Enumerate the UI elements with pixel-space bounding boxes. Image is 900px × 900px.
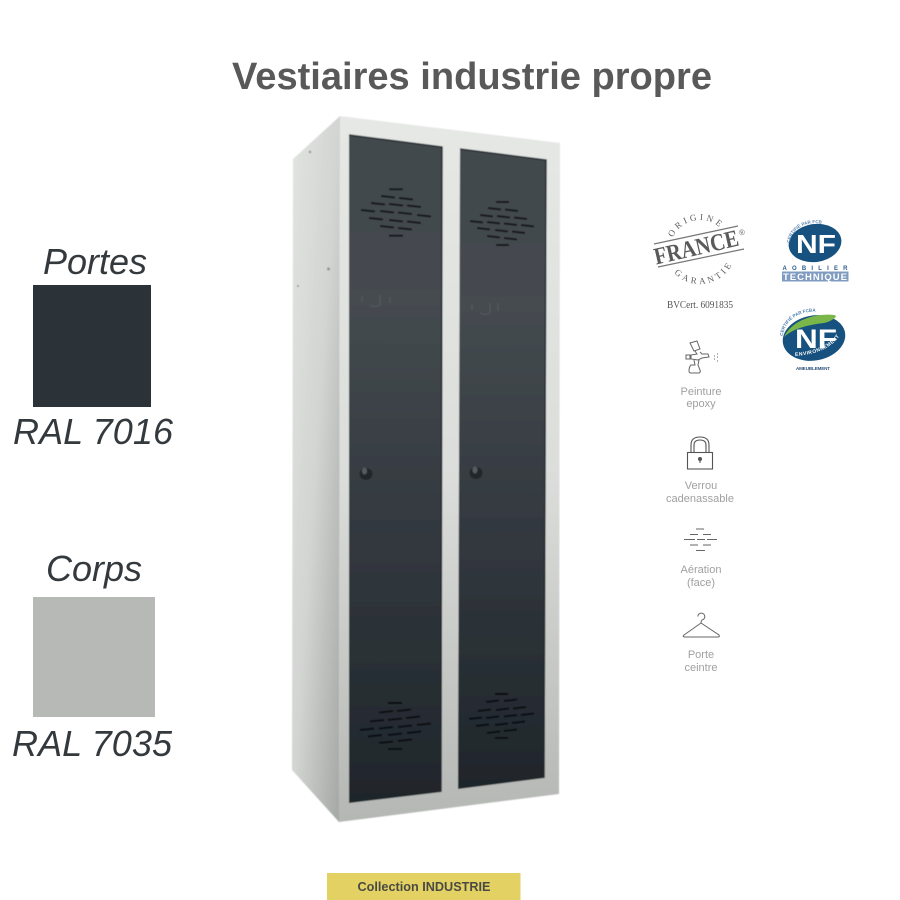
label: ventilation: Aération xyxy=(681,564,721,576)
right door top vent xyxy=(470,202,534,245)
logo: Origine France Garantie: ORIGINE xyxy=(668,214,722,236)
locker illustration xyxy=(292,116,560,822)
left door xyxy=(349,135,442,803)
right door handle xyxy=(470,466,482,479)
logo: NF mobilier technique: AOBILIER xyxy=(782,266,848,272)
icon: padlock xyxy=(688,437,712,469)
icon: ventilation slots xyxy=(684,529,717,550)
label: coat hanger: Porte xyxy=(688,649,714,661)
logo: Origine France Garantie xyxy=(652,214,746,284)
label: padlock: Verrou xyxy=(685,480,717,492)
logo: NF mobilier technique: TECHNIQUE xyxy=(783,272,847,283)
logo: Origine France Garantie: ® xyxy=(738,227,746,238)
logo: NF mobilier technique: CERTIFIÉ PAR FCBA xyxy=(787,220,822,243)
title: Vestiaires industrie propre xyxy=(232,56,712,98)
feature: padlock: cadenassable xyxy=(666,493,734,505)
left door embossed mark xyxy=(362,295,390,306)
collection banner xyxy=(327,873,520,900)
door colour code: RAL 7016 xyxy=(13,411,174,452)
collection banner: Collection INDUSTRIE xyxy=(358,880,490,894)
feature: ventilation xyxy=(681,529,721,589)
feature: coat hanger: ceintre xyxy=(684,662,718,674)
right door embossed mark xyxy=(472,303,498,314)
logo: NF environnement: NF xyxy=(795,324,837,354)
side panel holes xyxy=(297,151,330,287)
logo: NF environnement: ENVIRONNEMENT xyxy=(795,334,838,356)
label: epoxy paint: Peinture xyxy=(681,386,721,398)
panel: door colour xyxy=(13,241,174,452)
right door bottom vent xyxy=(469,694,534,738)
right door xyxy=(458,149,546,789)
logo: Origine France Garantie: GARANTIE xyxy=(675,263,732,284)
certificate number: BVCert. 6091835 xyxy=(667,300,733,311)
door colour heading: Portes xyxy=(43,241,147,282)
logo: NF environnement xyxy=(780,308,846,371)
feature: coat hanger xyxy=(683,613,719,674)
locker side panel xyxy=(292,116,340,822)
feature: padlock xyxy=(666,437,734,505)
feature: epoxy paint: epoxy xyxy=(686,398,716,410)
logo: NF environnement: CERTIFIÉ PAR FCBA xyxy=(780,308,816,336)
feature: epoxy paint xyxy=(681,341,721,410)
panel: body colour xyxy=(12,548,173,764)
body colour heading: Corps xyxy=(46,548,142,589)
logo: NF mobilier technique: NF xyxy=(796,229,836,259)
body colour code: RAL 7035 xyxy=(12,723,173,764)
left door top vent xyxy=(361,189,431,236)
locker front frame xyxy=(339,116,560,822)
logo: Origine France Garantie: FRANCE xyxy=(652,226,741,271)
body colour swatch xyxy=(33,597,155,717)
icon: spray gun xyxy=(686,341,718,373)
left door bottom vent xyxy=(360,703,431,749)
icon: coat hanger xyxy=(683,613,719,637)
logo: NF environnement: AMEUBLEMENT xyxy=(796,366,830,371)
logo: NF mobilier technique xyxy=(782,220,848,283)
left door handle xyxy=(360,468,372,480)
door colour swatch xyxy=(33,285,151,407)
feature: ventilation: (face) xyxy=(687,577,715,589)
